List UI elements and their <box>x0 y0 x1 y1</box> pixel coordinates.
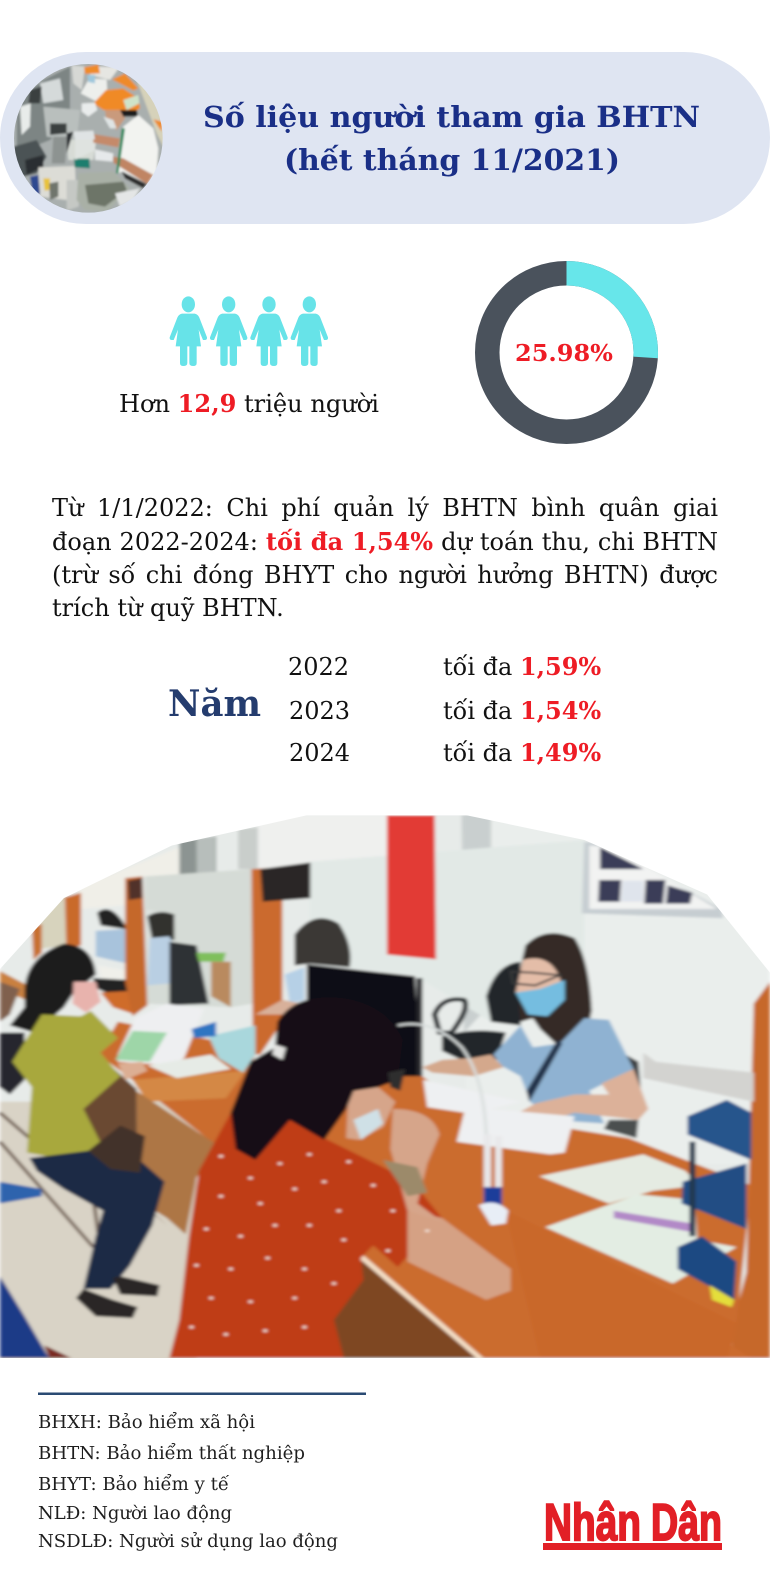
donut chart 25.98% <box>475 261 658 444</box>
framed poster <box>582 842 723 918</box>
folding chair <box>0 1113 98 1247</box>
counter top <box>98 1022 751 1358</box>
logo: Nhân Dân: Nhân <box>544 1494 641 1552</box>
heading <box>203 100 700 177</box>
yearly table: tối đa 1,59% <box>443 652 601 681</box>
paragraph: đoạn 2022-2024: tối đa 1,54% dự toán thu, chi BHTN <box>52 527 718 556</box>
paragraph: (trừ số chi đóng BHYT cho người hưởng BHTN) được <box>52 561 718 589</box>
legend rule and abbreviations: BHXH: Bảo hiểm xã hội <box>38 1413 255 1433</box>
notice on wall <box>643 1053 754 1102</box>
clerk <box>422 933 648 1131</box>
legend rule and abbreviations <box>38 1392 366 1552</box>
yearly table: 2024 <box>289 739 350 767</box>
header pill <box>0 52 770 224</box>
yearly table: 2023 <box>289 697 350 725</box>
counter displays <box>260 863 310 902</box>
orange posts <box>65 893 81 949</box>
yearly table: tối đa 1,49% <box>443 738 601 767</box>
monitor <box>304 962 420 1079</box>
label: year: Năm <box>168 682 261 725</box>
heading: Số liệu người tham gia BHTN <box>203 100 700 134</box>
photo: employment office counter <box>0 815 770 1358</box>
second clerk <box>295 918 350 967</box>
people count text: Hơn 12,9 triệu người <box>119 389 379 418</box>
seated customer, yellow jacket <box>10 944 165 1318</box>
yearly table <box>168 652 601 767</box>
counter front <box>81 1070 162 1220</box>
legend rule and abbreviations: BHYT: Bảo hiểm y tế <box>38 1475 229 1495</box>
legend rule and abbreviations: BHTN: Bảo hiểm thất nghiệp <box>38 1444 305 1464</box>
pen stand <box>484 1134 502 1204</box>
heading: (hết tháng 11/2021) <box>284 143 620 177</box>
red banner <box>387 815 436 959</box>
papers <box>423 1080 575 1154</box>
paragraph: trích từ quỹ BHTN. <box>52 594 284 622</box>
glass reflections <box>145 869 253 1007</box>
paragraph: Từ 1/1/2022: Chi phí quản lý BHTN bình quân giai <box>52 494 718 522</box>
legend rule and abbreviations: NSDLĐ: Người sử dụng lao động <box>38 1532 338 1552</box>
floor <box>0 1102 196 1363</box>
yearly table: tối đa 1,54% <box>443 696 601 725</box>
blue trays <box>688 1100 751 1160</box>
yearly table: 2022 <box>288 653 349 681</box>
customer in red dress <box>169 997 511 1358</box>
header photo: factory workers <box>14 64 163 213</box>
legend rule and abbreviations: NLĐ: Người lao động <box>38 1504 232 1524</box>
paragraph <box>52 494 718 622</box>
office chair <box>486 962 521 1025</box>
donut chart 25.98%: 25.98% <box>515 340 613 367</box>
icons: four people <box>170 296 328 366</box>
